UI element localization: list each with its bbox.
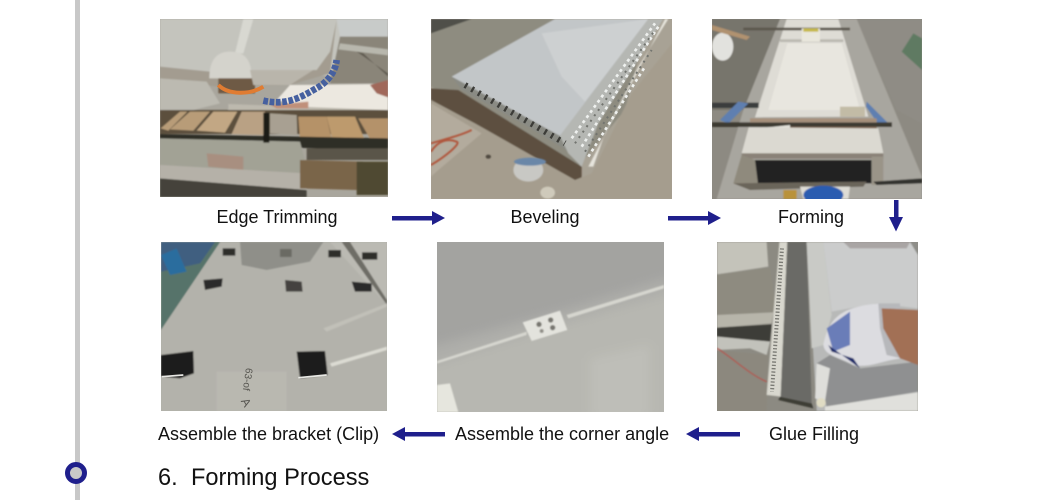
label: Assemble the corner angle: Assemble the corner angle [455, 424, 669, 444]
arrow: edge trimming to beveling [392, 211, 445, 225]
photo: assemble the bracket [161, 242, 387, 411]
photo: beveling [431, 19, 672, 199]
arrow: forming to glue filling [889, 200, 903, 232]
arrow: corner angle to bracket [392, 427, 445, 441]
honeycomb cut edge [465, 85, 565, 143]
photo: assemble the corner angle [437, 242, 664, 412]
handwritten mark: 63-of [240, 367, 254, 392]
label: Forming: Forming [778, 207, 844, 227]
label: Beveling: Beveling [510, 207, 580, 227]
label: Assemble the bracket (Clip): Assemble the bracket (Clip) [158, 424, 379, 444]
label: Edge Trimming: Edge Trimming [216, 207, 338, 227]
photo: forming [712, 19, 922, 204]
timeline bar [75, 0, 80, 500]
heading: 6. [158, 465, 178, 491]
heading: Forming Process [191, 465, 369, 491]
arrow: beveling to forming [668, 211, 721, 225]
photo: edge trimming [160, 19, 388, 197]
bracket highlights [162, 375, 327, 378]
arrow: glue filling to corner angle [686, 427, 740, 441]
timeline node [68, 464, 84, 482]
photo: assemble the bracket: A [238, 395, 254, 409]
label: Glue Filling: Glue Filling [769, 424, 859, 444]
photo: glue filling [717, 242, 918, 411]
